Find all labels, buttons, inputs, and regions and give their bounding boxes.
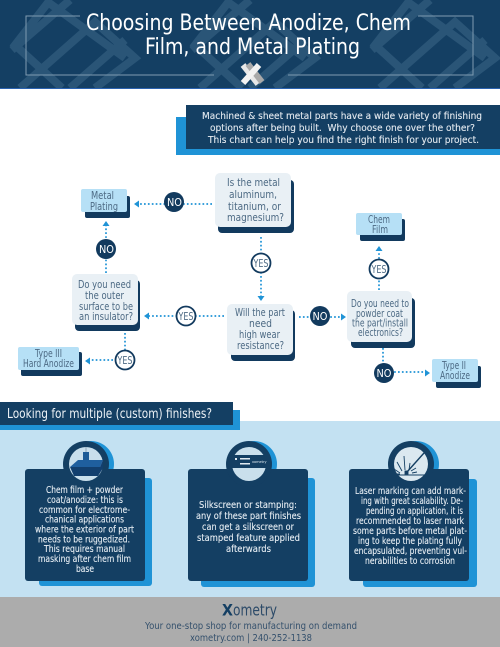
badge: NO top: NO <box>167 197 182 209</box>
footer text: Your one-stop shop for manufacturing on demand <box>144 621 357 632</box>
intro callout: This chart can help you find the right finish for your project. <box>207 135 479 146</box>
card text: common for electrome- <box>39 505 130 516</box>
question: powder coat: electronics? <box>358 327 403 339</box>
card: silkscreen or stamping <box>188 441 315 587</box>
question: aluminum, titanium, magnesium <box>215 173 294 233</box>
badge: NO left <box>96 239 116 259</box>
question: insulator: an insulator? <box>79 311 133 323</box>
section heading <box>0 402 240 430</box>
footer logo <box>222 600 277 620</box>
question: high wear resistance: high wear <box>239 329 281 341</box>
card text: base <box>76 564 94 575</box>
flowchart <box>18 173 481 388</box>
result: Chem Film: Chem <box>368 214 390 226</box>
card: chem film + powder coat <box>25 441 152 586</box>
result: Type III Hard Anodize <box>18 347 82 376</box>
card text: Laser marking can add mark- <box>355 486 466 497</box>
badge: YES bottom-left <box>116 350 134 370</box>
title: Film, and Metal Plating <box>145 34 360 60</box>
footer logo: X <box>222 600 234 620</box>
question: high wear resistance <box>227 304 295 361</box>
title <box>86 10 411 60</box>
card: laser marking <box>349 441 477 587</box>
card text: ing to keep the plating fully <box>358 536 462 547</box>
card text <box>353 486 467 567</box>
badge: NO left: NO <box>99 244 114 256</box>
question: insulator <box>72 274 140 331</box>
badge: YES right <box>370 260 388 278</box>
card text: recommended to laser mark <box>356 516 464 527</box>
question: powder coat: Do you need to <box>351 298 409 310</box>
card text: afterwards <box>226 544 271 555</box>
icon: Xometry X logo <box>243 64 262 84</box>
card text: Chem film + powder <box>46 485 123 496</box>
question: high wear resistance: resistance? <box>237 340 284 352</box>
icon: machined block <box>70 447 103 476</box>
card text: some parts before metal plat- <box>353 526 467 537</box>
icon: stamped plate <box>232 455 267 468</box>
card text: where the exterior of part <box>35 524 134 536</box>
question: powder coat: powder coat <box>356 308 403 320</box>
result: Chem Film: Film <box>372 224 388 236</box>
card text: encapsulated, preventing vul- <box>354 546 467 557</box>
card text <box>196 500 301 555</box>
icon: laser sparks <box>394 453 426 475</box>
question: aluminum, titanium, magnesium: aluminum, <box>229 189 277 201</box>
connector: insulator to type III <box>85 333 125 364</box>
badge: NO center-right <box>310 306 330 326</box>
badge: YES center <box>252 254 270 272</box>
title: Choosing Between Anodize, Chem <box>86 10 411 36</box>
card text: masking after chem film <box>38 554 131 565</box>
result: Type II Anodize: Anodize <box>440 370 470 382</box>
question: high wear resistance: need <box>249 318 272 330</box>
card text: stamped feature applied <box>197 533 300 544</box>
card text <box>35 485 134 575</box>
intro callout: options after being built. Why choose one over the other? <box>210 123 475 134</box>
badge: NO center-right: NO <box>312 311 328 323</box>
card text: pending on application, it is <box>366 506 463 517</box>
connector: powder coat to type II <box>383 348 430 376</box>
badge: YES bottom-left: YES <box>117 355 133 367</box>
result: Type II Anodize <box>432 359 481 388</box>
footer logo: ometry <box>233 600 277 620</box>
connector: insulator to metal plating <box>102 221 110 273</box>
footer <box>0 597 500 647</box>
connector: powder coat to chem film <box>376 246 382 290</box>
question: powder coat <box>347 291 415 348</box>
question: insulator: surface to be <box>79 301 133 313</box>
intro callout <box>176 105 500 155</box>
card text: needs to be ruggedized. <box>38 534 130 546</box>
section heading: Looking for multiple (custom) finishes? <box>7 407 212 422</box>
connector: question 1 to metal plating <box>134 200 212 208</box>
card text: coat/anodize: this is <box>47 495 123 506</box>
card text: chanical applications <box>45 514 124 526</box>
footer text: xometry.com | 240-252-1138 <box>190 633 312 644</box>
connector: question 1 to wear <box>258 237 264 301</box>
card text: any of these part finishes <box>196 511 301 522</box>
card text: can get a silkscreen or <box>202 522 295 533</box>
result: Chem Film <box>356 213 405 241</box>
badge: YES center-left: YES <box>178 311 194 323</box>
card text: nerabilities to corrosion <box>365 556 455 567</box>
question: insulator: the outer <box>85 290 125 302</box>
card text: This requires manual <box>43 544 125 555</box>
question: aluminum, titanium, magnesium: magnesium? <box>227 212 284 224</box>
card text: ing with great scalability. De- <box>361 496 463 507</box>
result: Metal Plating <box>81 189 130 218</box>
panel: multiple finishes <box>0 402 500 597</box>
badge: NO bottom-right <box>374 363 394 383</box>
result: Metal Plating: Metal <box>91 190 114 202</box>
question: high wear resistance: Will the part <box>235 307 285 319</box>
result: Type III Hard Anodize: Hard Anodize <box>23 358 74 370</box>
question: powder coat: the part/install <box>352 318 408 330</box>
badge: NO bottom-right: NO <box>376 368 392 380</box>
connector: wear to insulator <box>144 312 224 320</box>
result: Type III Hard Anodize: Type III <box>34 348 62 360</box>
question: insulator: Do you need <box>78 279 131 291</box>
badge: NO top <box>164 192 184 212</box>
header banner <box>0 0 500 89</box>
result: Type II Anodize: Type II <box>441 360 466 372</box>
question: aluminum, titanium, magnesium: Is the metal <box>227 177 280 189</box>
icon: stamped plate: xometry <box>252 460 267 464</box>
connector: wear to powder coat <box>299 314 346 320</box>
badge: YES center: YES <box>253 258 269 270</box>
result: Metal Plating: Plating <box>90 201 118 213</box>
question: aluminum, titanium, magnesium: titanium, or <box>228 201 282 213</box>
footer text <box>144 621 357 644</box>
badge: YES right: YES <box>371 264 387 276</box>
badge: YES center-left <box>176 306 196 326</box>
card text: Silkscreen or stamping: <box>199 500 297 511</box>
